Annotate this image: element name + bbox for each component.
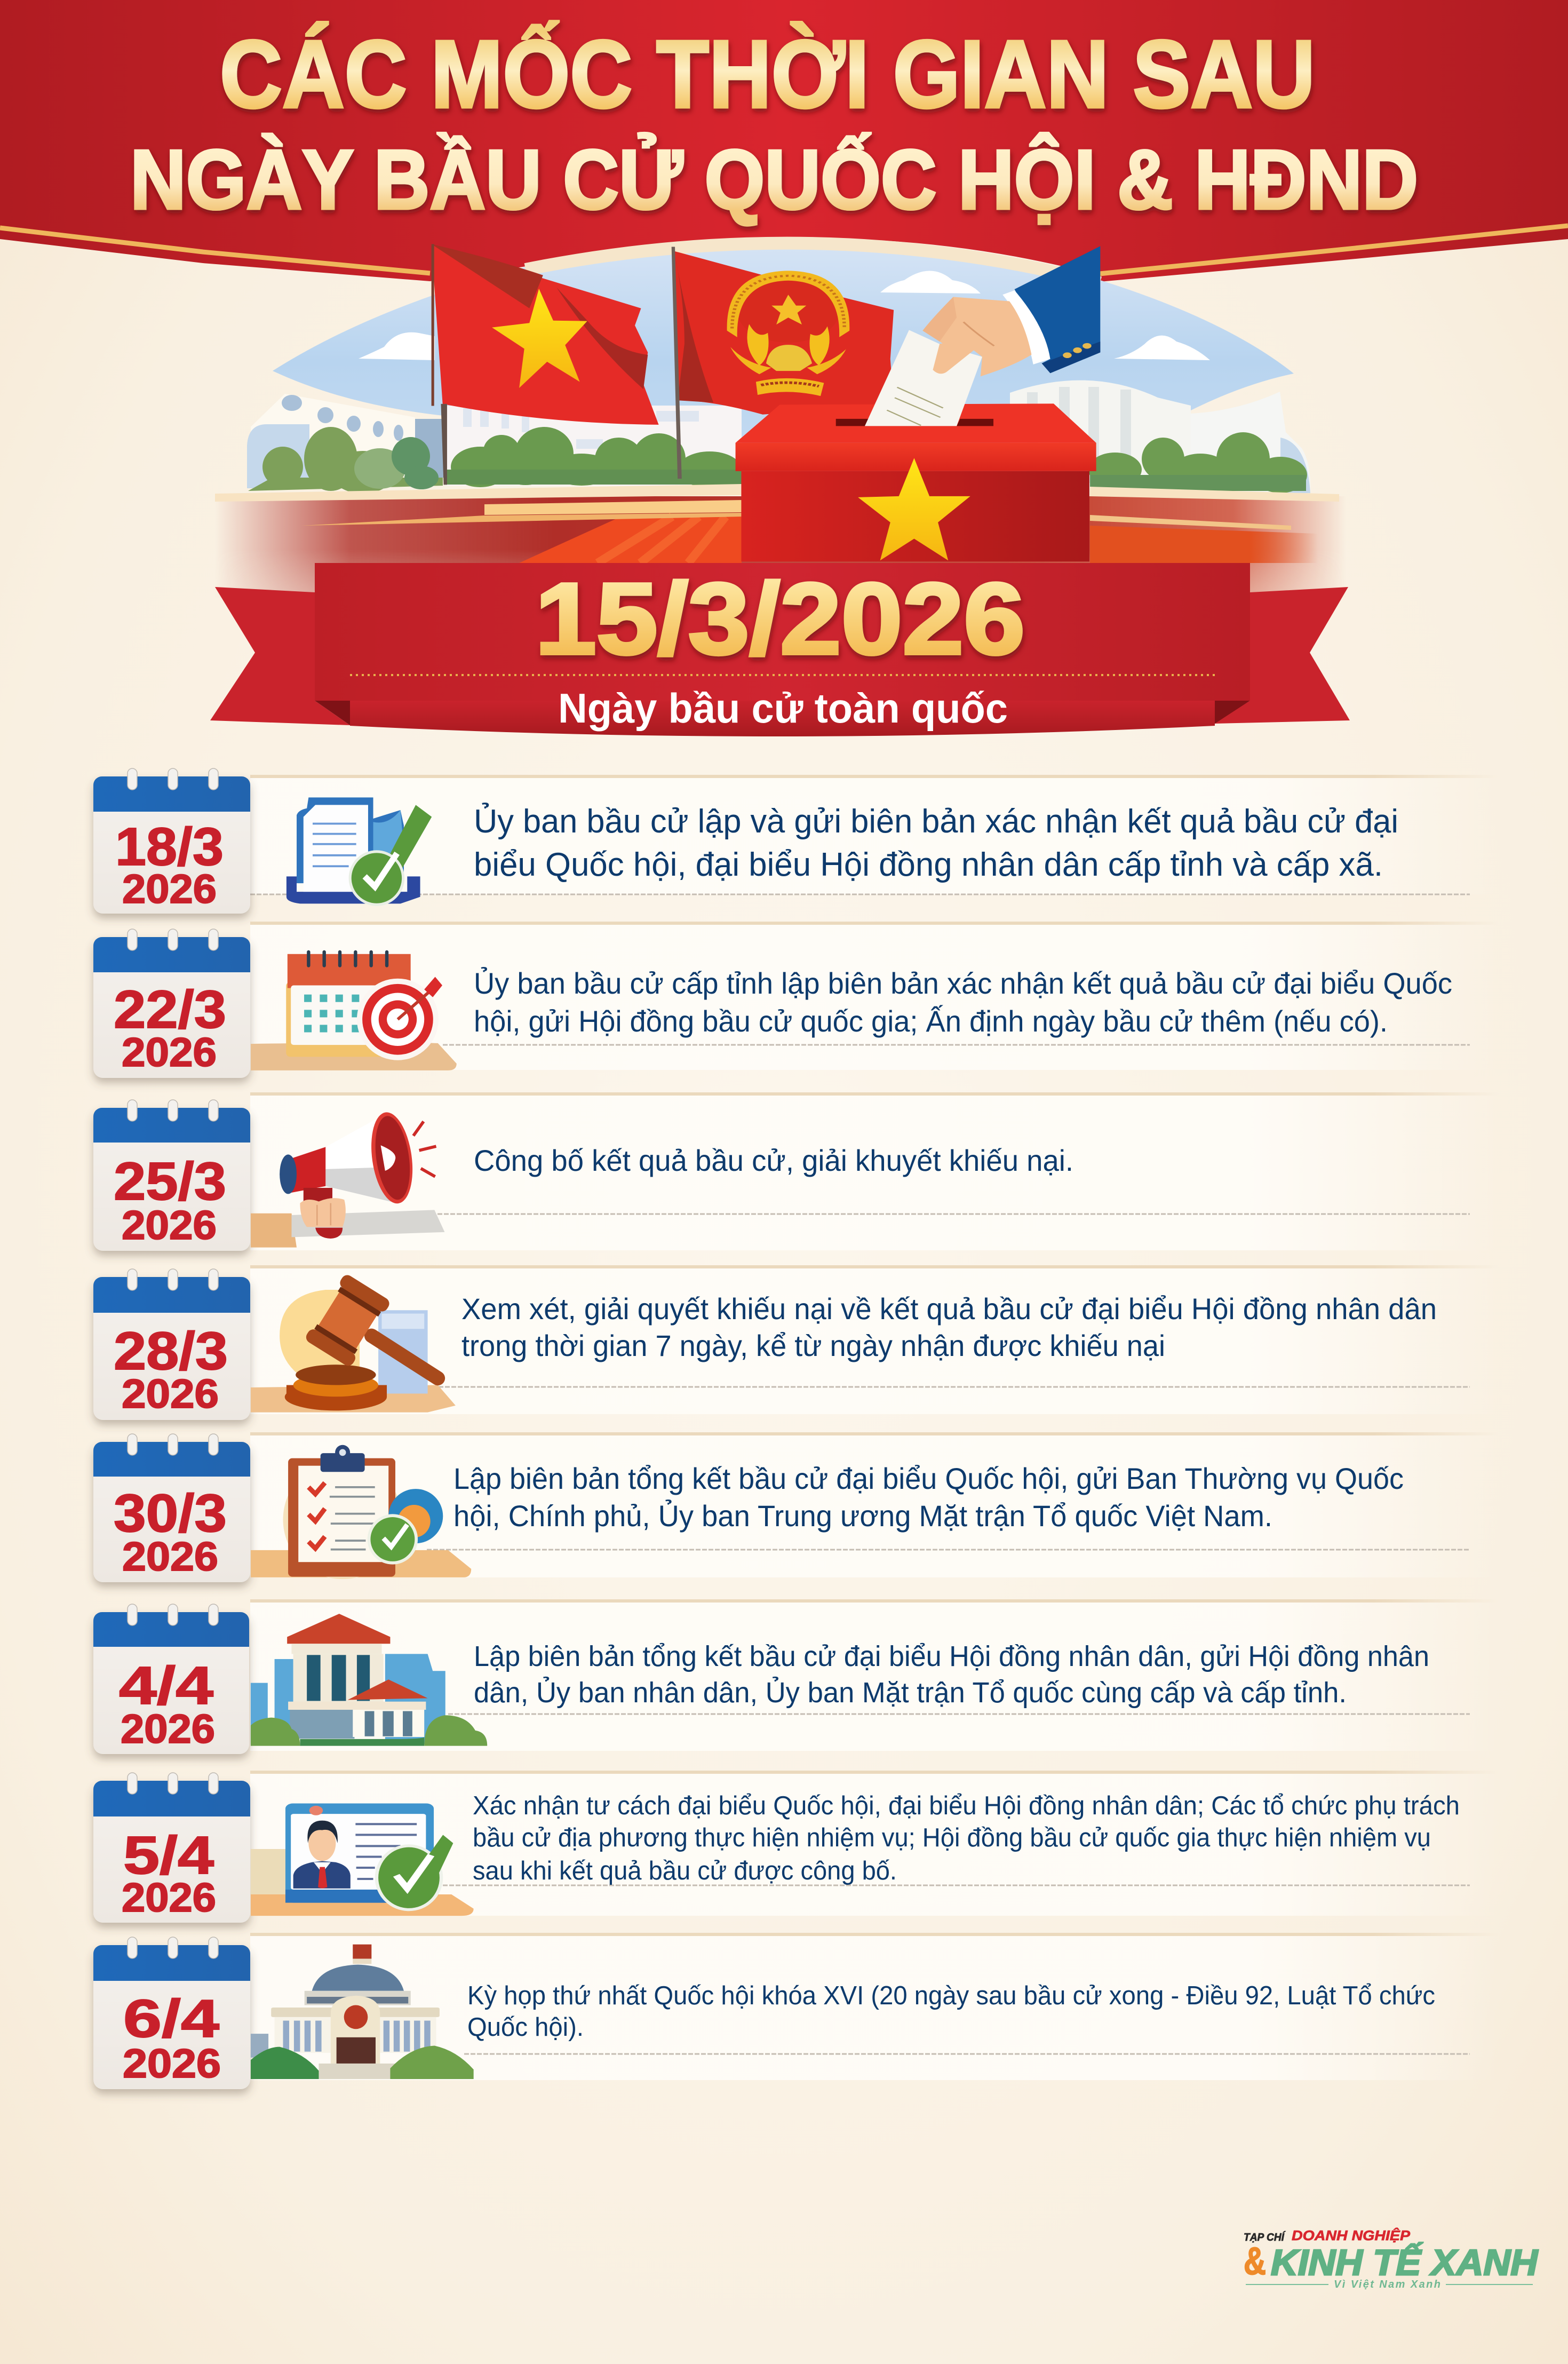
text: hội, Chính phủ, Ủy ban Trung ương Mặt trận Tổ quốc Việt Nam. xyxy=(453,1499,1272,1533)
calendar: 5/4/2026: 2026 xyxy=(122,1875,216,1921)
text: sau khi kết quả bầu cử được công bố. xyxy=(473,1857,897,1885)
illustration: election scene xyxy=(215,241,1346,598)
calendar: 18/3/2026: 2026 xyxy=(122,867,217,912)
calendar: 25/3/2026: 2026 xyxy=(122,1203,217,1248)
panel: 22/3 xyxy=(93,922,1499,1078)
text: bầu cử địa phương thực hiện nhiệm vụ; Hội đồng bầu cử quốc gia thực hiện nhiệm vụ xyxy=(473,1823,1431,1852)
calendar: 30/3/2026: 30/3 xyxy=(114,1484,227,1543)
calendar: 18/3/2026: 18/3 xyxy=(115,817,224,877)
panel: 25/3 xyxy=(93,1092,1499,1251)
text xyxy=(461,1292,1437,1362)
text xyxy=(474,966,1452,1038)
subtitle: Ngày bầu cử toàn quốc xyxy=(558,685,1008,732)
logo: Vì Việt Nam Xanh xyxy=(1334,2279,1440,2290)
hand and sleeve xyxy=(1015,246,1100,373)
trees xyxy=(248,427,1307,494)
text: dân, Ủy ban nhân dân, Ủy ban Mặt trận Tổ quốc cùng cấp và cấp tỉnh. xyxy=(474,1677,1347,1709)
icon: megaphone xyxy=(251,1109,444,1248)
calendar: 30/3/2026 xyxy=(93,1434,250,1582)
logo xyxy=(1244,2227,1539,2290)
title: NGÀY BẦU CỬ QUỐC HỘI & HĐND xyxy=(130,133,1418,227)
text xyxy=(467,1981,1435,2042)
calendar: 25/3/2026: 25/3 xyxy=(114,1152,226,1211)
text: Quốc hội). xyxy=(467,2013,584,2042)
flag: Vietnam national flag xyxy=(432,244,659,485)
arch xyxy=(526,243,1100,283)
text xyxy=(453,1462,1404,1533)
icon: government building xyxy=(251,1614,487,1746)
logo: DOANH NGHIỆP xyxy=(1292,2227,1411,2243)
title: CÁC MỐC THỜI GIAN SAU xyxy=(220,21,1315,128)
text xyxy=(473,1791,1460,1885)
icon: ID card with check xyxy=(251,1803,474,1916)
calendar: 28/3/2026: 28/3 xyxy=(114,1321,228,1381)
logo: & xyxy=(1244,2240,1266,2283)
calendar: 30/3/2026: 2026 xyxy=(122,1534,218,1580)
calendar: 25/3/2026 xyxy=(93,1100,250,1251)
panel: 28/3 xyxy=(93,1265,1499,1420)
star xyxy=(858,458,970,560)
calendar: 6/4/2026: 2026 xyxy=(123,2041,221,2087)
text: trong thời gian 7 ngày, kể từ ngày nhận được khiếu nại xyxy=(461,1329,1165,1362)
logo: KINH TẾ XANH xyxy=(1271,2242,1539,2283)
calendar: 5/4/2026 xyxy=(93,1773,250,1923)
text: Lập biên bản tổng kết bầu cử đại biểu Hội đồng nhân dân, gửi Hội đồng nhân xyxy=(474,1640,1429,1672)
calendar: 22/3/2026: 22/3 xyxy=(114,980,226,1040)
calendar: 28/3/2026: 2026 xyxy=(122,1371,219,1417)
text: Ủy ban bầu cử lập và gửi biên bản xác nhận kết quả bầu cử đại xyxy=(474,803,1398,840)
calendar: 22/3/2026: 2026 xyxy=(122,1030,217,1075)
buildings xyxy=(247,380,1310,493)
box lid xyxy=(736,403,1096,443)
calendar: 22/3/2026 xyxy=(93,929,250,1078)
panel: 30/3 xyxy=(93,1432,1499,1582)
header banner xyxy=(0,0,1568,282)
ground and steps xyxy=(215,484,1346,598)
calendar: 28/3/2026 xyxy=(93,1269,250,1420)
title xyxy=(130,21,1418,227)
ribbon banner xyxy=(210,562,1350,736)
icon: document with check xyxy=(286,797,432,906)
calendar: 6/4/2026: 6/4 xyxy=(123,1989,219,2049)
text: Lập biên bản tổng kết bầu cử đại biểu Quốc hội, gửi Ban Thường vụ Quốc xyxy=(453,1462,1404,1495)
calendar: 4/4/2026: 2026 xyxy=(121,1707,215,1752)
logo: TẠP CHÍ xyxy=(1244,2231,1286,2243)
ballot xyxy=(865,330,982,426)
text xyxy=(474,1640,1429,1709)
box body xyxy=(741,471,1089,561)
calendar: 18/3/2026 xyxy=(93,768,250,914)
text: Kỳ họp thứ nhất Quốc hội khóa XVI (20 ngày sau bầu cử xong - Điều 92, Luật Tổ chức xyxy=(467,1981,1435,2010)
clouds xyxy=(359,271,1210,360)
calendar: 5/4/2026: 5/4 xyxy=(123,1826,214,1885)
calendar: 4/4/2026 xyxy=(93,1604,249,1754)
panel: 6/4 xyxy=(93,1933,1499,2089)
text: Xem xét, giải quyết khiếu nại về kết quả bầu cử đại biểu Hội đồng nhân dân xyxy=(461,1292,1437,1326)
sky xyxy=(273,241,1294,480)
emblem xyxy=(727,271,849,396)
ballot box with hand xyxy=(736,246,1100,561)
icon: gavel xyxy=(251,1273,456,1413)
panel: 5/4 xyxy=(93,1771,1499,1923)
panel: 4/4 xyxy=(93,1599,1499,1754)
calendar: 4/4/2026: 4/4 xyxy=(119,1656,213,1716)
icon: calendar with target xyxy=(251,950,457,1070)
text: hội, gửi Hội đồng bầu cử quốc gia; Ấn định ngày bầu cử thêm (nếu có). xyxy=(474,1004,1388,1038)
icon: checklist clipboard xyxy=(251,1445,471,1579)
text: Xác nhận tư cách đại biểu Quốc hội, đại biểu Hội đồng nhân dân; Các tổ chức phụ trách xyxy=(473,1791,1460,1820)
text: Công bố kết quả bầu cử, giải khuyết khiếu nại. xyxy=(474,1144,1073,1177)
calendar: 6/4/2026 xyxy=(93,1937,250,2089)
text: biểu Quốc hội, đại biểu Hội đồng nhân dân cấp tỉnh và cấp xã. xyxy=(474,846,1383,883)
panel: 18/3 xyxy=(93,768,1499,914)
icon: National Assembly building xyxy=(251,1945,474,2079)
text: Ủy ban bầu cử cấp tỉnh lập biên bản xác nhận kết quả bầu cử đại biểu Quốc xyxy=(474,966,1452,1000)
text xyxy=(474,803,1398,883)
flag: national emblem flag xyxy=(672,247,894,479)
date: 15/3/2026 xyxy=(535,562,1025,676)
